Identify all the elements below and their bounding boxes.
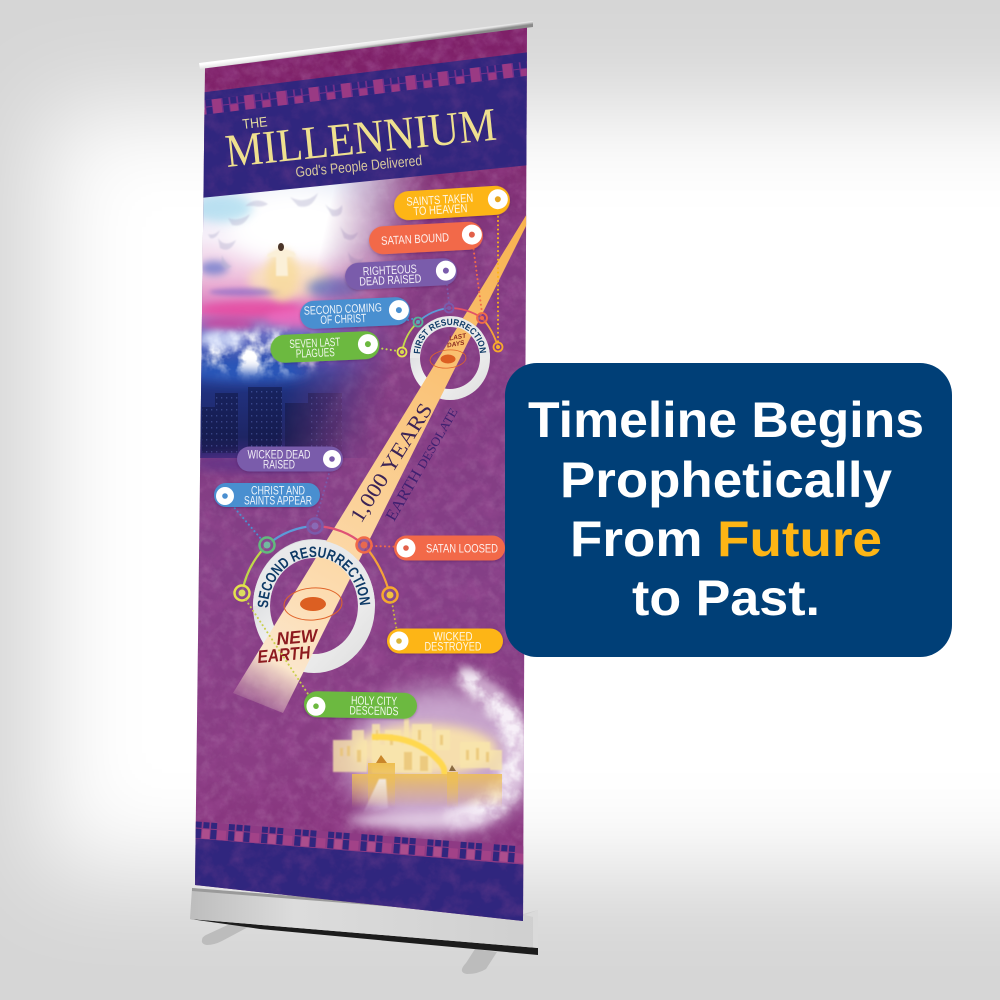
pill: christ and saints appear: CHRIST AND: [251, 484, 305, 498]
title: MILLENNIUM: [223, 99, 499, 178]
bottom photo: holy city in clouds: [333, 668, 535, 832]
callout: From Future: [570, 511, 882, 567]
banner base: [190, 888, 538, 974]
pill: saints taken to heaven: [393, 185, 511, 221]
ring label: first resurrection: FIRST RESURRECTION: [414, 318, 486, 354]
clouds: [190, 331, 334, 372]
pill: satan loosed: SATAN LOOSED: [426, 542, 498, 556]
pill: holy city descends: [304, 691, 417, 719]
pill: seven last plagues: SEVEN LAST: [289, 335, 341, 351]
label: 1,000 years: 1,000 YEARS: [345, 399, 437, 527]
left foot: [202, 923, 252, 945]
pill: righteous dead raised: [344, 258, 458, 290]
roll-up banner stand: [190, 21, 538, 974]
timeline beam: [233, 209, 530, 713]
timeline: first resurrection ring: [410, 316, 490, 400]
label: new earth: [258, 629, 318, 663]
pill: holy city descends: DESCENDS: [349, 703, 399, 718]
pill: saints taken to heaven: SAINTS TAKEN: [406, 191, 474, 209]
city skyline: [202, 387, 342, 453]
ring tops over the beam: [262, 322, 485, 606]
label: new earth: EARTH: [257, 642, 312, 667]
pill: second coming of christ: [299, 297, 411, 329]
pill: satan bound: SATAN BOUND: [381, 230, 450, 248]
top checker strip: [190, 61, 530, 116]
pill: second coming of christ: OF CHRIST: [320, 311, 367, 327]
pill: holy city descends: HOLY CITY: [351, 693, 397, 708]
title: God's People Delivered: [295, 153, 423, 181]
callout: Timeline Begins: [528, 392, 924, 448]
pill: saints taken to heaven: TO HEAVEN: [413, 201, 468, 218]
bottom band: [195, 838, 524, 921]
bottom checker strip: [190, 821, 530, 865]
icon: city buildings: [333, 718, 502, 815]
top title band: [190, 52, 530, 199]
pill: wicked destroyed: WICKED: [434, 630, 473, 644]
photo: sky with Christ, clouds and city: [200, 165, 432, 458]
target: last days: [430, 350, 466, 368]
pill: christ and saints appear: [214, 483, 320, 508]
timeline: second resurrection ring: [253, 539, 375, 673]
dotted connectors: [232, 208, 498, 700]
label: earth desolate: EARTH DESOLATE: [383, 404, 462, 524]
right foot: [462, 949, 497, 974]
label: last days: LAST: [449, 332, 468, 342]
connector arcs: first resurrection: [398, 304, 502, 356]
top rail: [199, 21, 533, 69]
target: new earth: [283, 586, 343, 622]
pill: christ and saints appear: SAINTS APPEAR: [244, 494, 312, 508]
pill: wicked destroyed: [387, 628, 503, 654]
ring label: second resurrection: SECOND RESURRECTION: [258, 546, 370, 608]
pill: seven last plagues: [270, 331, 380, 363]
icon: Christ figure: [266, 243, 298, 301]
pill: satan bound: [368, 221, 484, 255]
pill: second coming of christ: SECOND COMING: [304, 300, 382, 318]
pill: righteous dead raised: DEAD RAISED: [359, 271, 422, 289]
connector arcs: second resurrection: [234, 518, 398, 602]
pill: wicked destroyed: DESTROYED: [424, 640, 482, 654]
callout: Prophetically: [560, 452, 892, 508]
label: last days: DAYS: [446, 339, 466, 349]
title: THE: [242, 113, 268, 132]
icon: doves: [208, 193, 364, 269]
pill: satan loosed: [394, 536, 505, 560]
label: new earth: NEW: [276, 625, 320, 649]
pill: wicked dead raised: [237, 446, 343, 472]
callout: to Past.: [632, 570, 820, 626]
pill: wicked dead raised: WICKED DEAD: [248, 448, 311, 462]
clouds around the city: [440, 668, 529, 830]
pill: righteous dead raised: RIGHTEOUS: [362, 262, 417, 278]
callout: [505, 363, 952, 657]
pill: seven last plagues: PLAGUES: [295, 345, 335, 361]
label: last days: [448, 333, 466, 348]
pill: wicked dead raised: RAISED: [263, 458, 295, 472]
banner graphic: [195, 28, 527, 921]
